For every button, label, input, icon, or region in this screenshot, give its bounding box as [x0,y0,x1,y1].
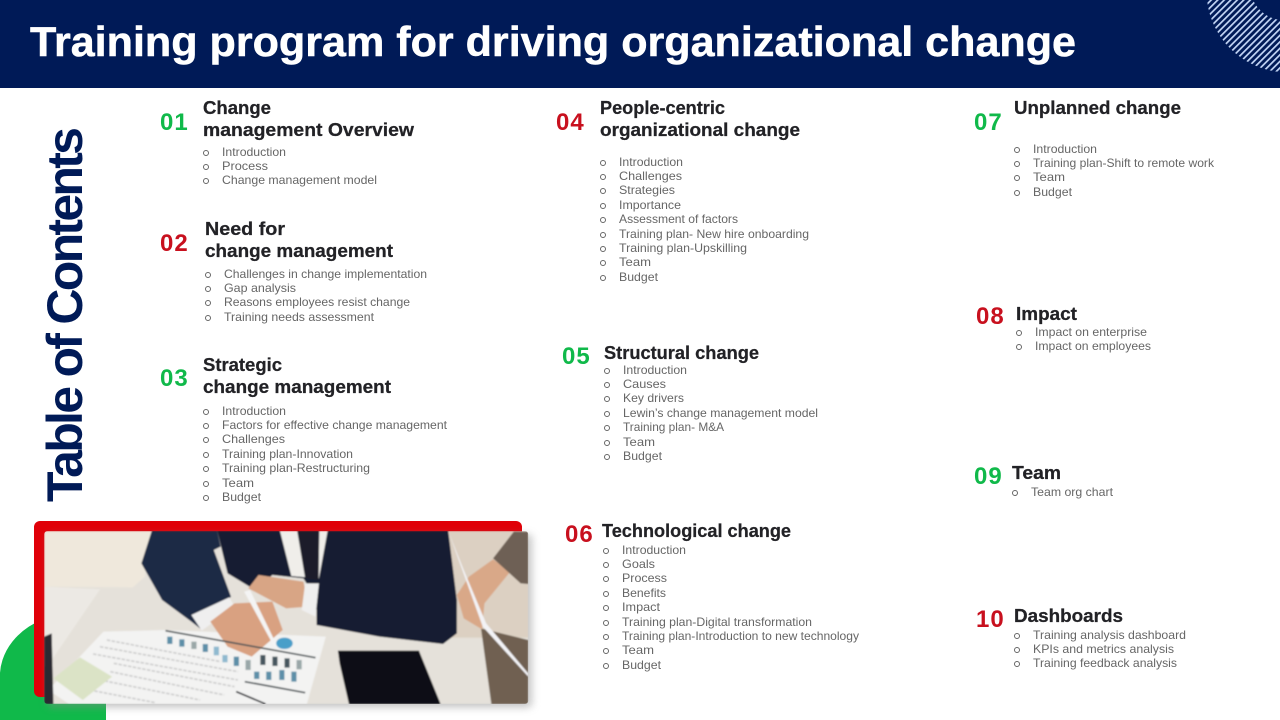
list 07: Training plan-Shift to remote work [1033,156,1215,170]
number 05: 05 [562,343,591,370]
list 03: Budget [222,490,262,504]
number 04: 04 [556,109,585,136]
number 03: 03 [160,365,189,392]
list 05: Key drivers [623,391,684,405]
heading 07: Unplanned change [1014,97,1181,118]
heading 08: Impact [1016,303,1077,324]
list 07: Introduction [1033,142,1097,156]
number 07: 07 [974,109,1003,136]
list 02: Training needs assessment [224,310,375,324]
list 04: Training plan-Upskilling [619,241,747,255]
list 07: Team [1033,170,1065,184]
list 03 [204,404,448,504]
list 03: Introduction [222,404,286,418]
header band [0,0,1280,88]
heading 05: Structural change [604,342,759,363]
number 09: 09 [974,463,1003,490]
heading 06: Technological change [602,520,791,541]
heading 10: Dashboards [1014,605,1123,626]
list 02 [206,267,427,324]
list 10: Training feedback analysis [1033,656,1177,670]
heading 09: Team [1012,462,1061,483]
section 04: organizational change [600,119,800,140]
section 04 [556,97,809,284]
hatched corner arc [1207,0,1280,72]
list 05: Lewin’s change management model [623,406,818,420]
heading 02: Need for [205,218,285,239]
list 07: Budget [1033,185,1073,199]
list 07 [1014,142,1215,199]
list 04: Assessment of factors [619,212,738,226]
heading 03: Strategic [203,354,282,375]
list 06: Benefits [622,586,666,600]
list 03: Team [222,476,254,490]
list 08 [1016,325,1151,353]
list 05 [604,363,818,463]
list 03: Training plan-Restructuring [222,461,370,475]
list 06: Process [622,571,667,585]
section 03: change management [203,376,391,397]
number 08: 08 [976,303,1005,330]
green corner shape [0,617,106,720]
list 05: Budget [623,449,663,463]
section 06 [565,520,859,672]
list 04: Team [619,255,651,269]
list 05: Causes [623,377,666,391]
number 02: 02 [160,230,189,257]
list 10 [1014,628,1186,670]
section 01: management Overview [203,119,415,140]
vertical heading: table of contents: Table of Contents [37,127,93,502]
list 06: Training plan-Digital transformation [622,615,812,629]
list 08: Impact on enterprise [1035,325,1147,339]
list 04: Strategies [619,183,675,197]
heading 01: Change [203,97,271,118]
list 06: Impact [622,600,661,614]
list 10: Training analysis dashboard [1033,628,1186,642]
list 09: Team org chart [1031,485,1114,499]
photo: business meeting over charts [44,531,532,707]
section 02: change management [205,240,393,261]
list 06: Training plan-Introduction to new technology [622,629,859,643]
list 05: Introduction [623,363,687,377]
section 08 [976,303,1151,353]
number 01: 01 [160,109,189,136]
list 04: Introduction [619,155,683,169]
number 10: 10 [976,606,1005,633]
section 05 [562,342,818,463]
red photo frame [34,521,522,697]
number 06: 06 [565,521,594,548]
list 05: Team [623,435,655,449]
section 03 [160,354,448,504]
list 04: Budget [619,270,659,284]
list 01 [204,145,377,187]
list 08: Impact on employees [1035,339,1151,353]
title: Training program for driving organizational change [30,18,1076,65]
list 02: Reasons employees resist change [224,295,410,309]
list 01: Process [222,159,268,173]
list 02: Gap analysis [224,281,296,295]
list 05: Training plan- M&A [623,420,724,434]
section 10 [976,605,1186,670]
section 02 [160,218,427,324]
section 09 [974,462,1114,499]
list 06: Introduction [622,543,686,557]
list 03: Factors for effective change management [222,418,448,432]
list 01: Change management model [222,173,377,187]
section 07 [974,97,1215,199]
list 02: Challenges in change implementation [224,267,427,281]
section 01 [160,97,415,187]
list 03: Challenges [222,432,285,446]
list 03: Training plan-Innovation [222,447,353,461]
list 04: Importance [619,198,681,212]
list 04 [600,155,809,284]
list 10: KPIs and metrics analysis [1033,642,1174,656]
list 04: Challenges [619,169,682,183]
list 06 [604,543,859,672]
list 06: Goals [622,557,655,571]
list 01: Introduction [222,145,286,159]
heading 04: People-centric [600,97,725,118]
list 04: Training plan- New hire onboarding [619,227,809,241]
list 06: Team [622,643,654,657]
list 06: Budget [622,658,662,672]
